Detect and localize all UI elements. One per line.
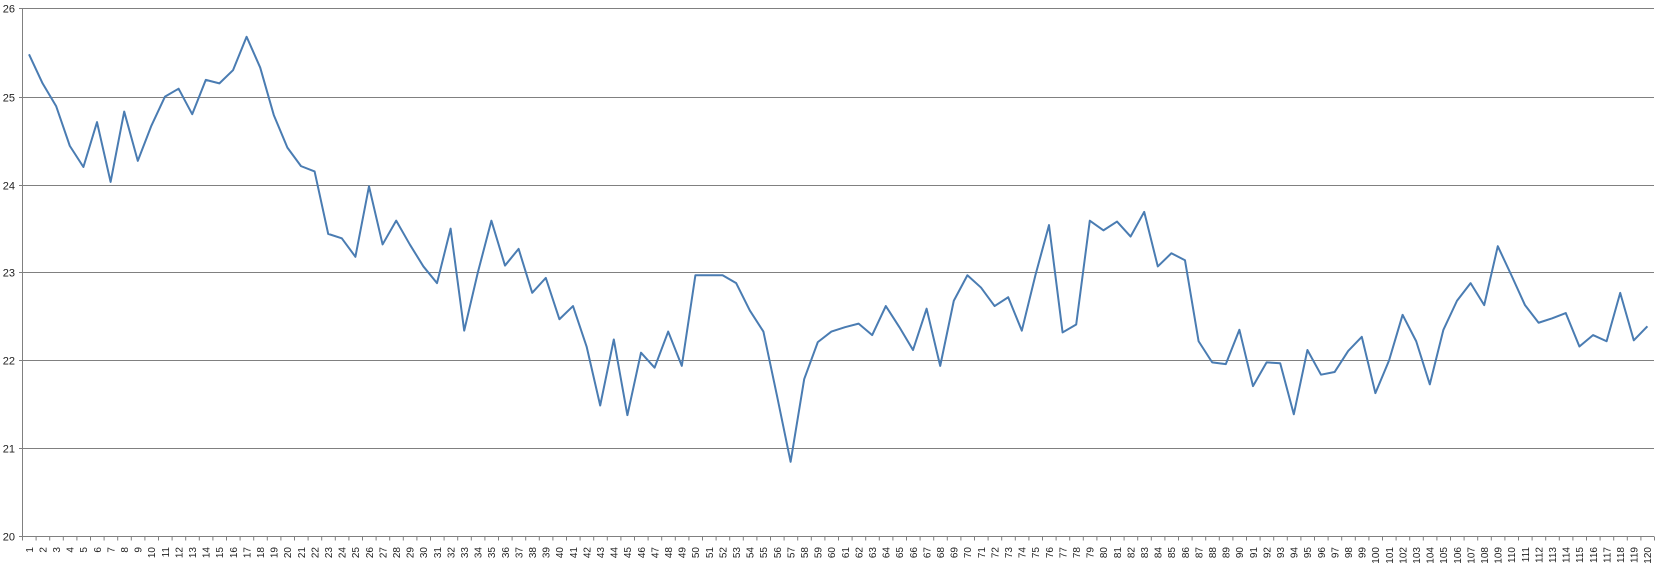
x axis labels: 42 [582, 547, 593, 558]
x axis labels: 74 [1018, 547, 1029, 558]
x axis labels: 22 [310, 547, 321, 558]
x axis labels: 27 [378, 547, 389, 558]
x axis labels: 116 [1589, 547, 1600, 563]
x axis labels: 58 [800, 547, 811, 558]
y axis labels: 21 [3, 444, 15, 456]
x axis labels: 81 [1113, 547, 1124, 558]
x axis labels: 15 [215, 547, 226, 558]
x axis labels: 3 [52, 547, 63, 553]
y axis labels: 24 [3, 180, 15, 192]
x axis labels: 104 [1426, 547, 1437, 564]
x axis labels: 68 [936, 547, 947, 558]
x axis labels: 1 [25, 547, 36, 553]
x axis labels: 102 [1398, 547, 1409, 564]
x axis labels: 6 [93, 547, 104, 553]
x axis labels: 66 [909, 547, 920, 558]
x axis labels: 8 [120, 547, 131, 553]
x axis labels: 63 [868, 547, 879, 558]
x axis labels: 33 [460, 547, 471, 558]
x axis labels: 117 [1602, 547, 1613, 563]
x axis labels: 13 [188, 547, 199, 558]
x axis labels: 26 [365, 547, 376, 558]
x axis labels: 39 [542, 547, 553, 558]
x axis labels: 64 [882, 547, 893, 558]
x axis labels: 88 [1208, 547, 1219, 558]
x axis labels: 94 [1290, 547, 1301, 558]
x axis labels: 107 [1466, 547, 1477, 564]
x axis labels: 32 [446, 547, 457, 558]
x axis labels: 111 [1521, 547, 1532, 562]
x axis labels: 73 [1004, 547, 1015, 558]
x axis labels: 21 [297, 547, 308, 558]
x axis labels: 37 [514, 547, 525, 558]
x axis labels: 36 [501, 547, 512, 558]
x axis labels: 41 [569, 547, 580, 558]
x axis labels: 34 [474, 547, 485, 558]
x axis labels: 108 [1480, 547, 1491, 564]
x axis labels: 55 [759, 547, 770, 558]
x axis labels: 96 [1317, 547, 1328, 558]
x axis labels: 114 [1562, 547, 1573, 563]
x axis labels: 17 [242, 547, 253, 558]
data line [29, 37, 1647, 462]
x axis labels: 83 [1140, 547, 1151, 558]
x axis labels: 118 [1616, 547, 1627, 563]
x axis labels: 77 [1058, 547, 1069, 558]
x axis labels: 56 [773, 547, 784, 558]
x axis labels: 51 [705, 547, 716, 558]
x axis labels: 79 [1086, 547, 1097, 558]
x axis labels: 12 [174, 547, 185, 558]
x axis labels: 99 [1358, 547, 1369, 558]
x axis labels: 80 [1099, 547, 1110, 558]
x axis labels: 65 [895, 547, 906, 558]
x axis labels: 53 [732, 547, 743, 558]
x axis labels: 30 [419, 547, 430, 558]
x axis labels: 76 [1045, 547, 1056, 558]
x axis labels: 23 [324, 547, 335, 558]
x axis labels: 97 [1330, 547, 1341, 558]
x axis labels: 49 [678, 547, 689, 558]
x axis labels: 43 [596, 547, 607, 558]
x axis labels: 16 [229, 547, 240, 558]
x axis labels: 19 [270, 547, 281, 558]
y axis labels: 22 [3, 356, 15, 368]
x axis labels: 57 [786, 547, 797, 558]
y axis labels: 20 [3, 532, 15, 544]
x axis labels: 110 [1507, 547, 1518, 563]
x axis labels: 84 [1154, 547, 1165, 558]
x axis labels: 101 [1385, 547, 1396, 564]
x axis labels: 103 [1412, 547, 1423, 564]
x axis labels: 98 [1344, 547, 1355, 558]
x axis labels: 46 [637, 547, 648, 558]
x axis labels: 70 [963, 547, 974, 558]
x axis labels: 100 [1371, 547, 1382, 564]
x axis labels: 89 [1222, 547, 1233, 558]
x axis labels: 105 [1439, 547, 1450, 564]
x axis labels: 38 [528, 547, 539, 558]
x axis labels: 95 [1303, 547, 1314, 558]
x axis labels: 90 [1235, 547, 1246, 558]
x axis labels: 48 [664, 547, 675, 558]
x axis labels: 7 [106, 547, 117, 553]
x axis labels: 93 [1276, 547, 1287, 558]
x axis labels: 85 [1167, 547, 1178, 558]
x axis labels: 61 [841, 547, 852, 558]
x axis labels: 60 [827, 547, 838, 558]
y axis labels [3, 4, 15, 544]
x axis labels: 40 [555, 547, 566, 558]
x axis labels: 11 [161, 547, 172, 557]
x axis labels: 35 [487, 547, 498, 558]
x axis labels: 115 [1575, 547, 1586, 563]
x axis labels: 52 [718, 547, 729, 558]
x axis labels: 24 [338, 547, 349, 558]
x axis labels: 109 [1494, 547, 1505, 564]
x axis labels: 59 [814, 547, 825, 558]
x axis labels: 10 [147, 547, 158, 558]
x axis labels: 47 [650, 547, 661, 558]
x axis labels: 20 [283, 547, 294, 558]
x axis labels: 120 [1643, 547, 1654, 564]
x axis labels: 87 [1194, 547, 1205, 558]
x axis labels: 92 [1262, 547, 1273, 558]
x axis labels: 112 [1534, 547, 1545, 563]
x axis labels: 86 [1181, 547, 1192, 558]
x axis labels: 4 [66, 547, 77, 553]
y axis labels: 26 [3, 4, 15, 16]
y axis labels: 25 [3, 92, 15, 104]
x axis labels: 119 [1630, 547, 1641, 563]
x axis labels: 75 [1031, 547, 1042, 558]
x axis labels: 28 [392, 547, 403, 558]
x axis labels: 54 [746, 547, 757, 558]
x axis labels: 91 [1249, 547, 1260, 558]
x axis labels: 31 [433, 547, 444, 558]
x axis labels: 50 [691, 547, 702, 558]
x axis labels: 9 [134, 547, 145, 553]
x axis labels: 2 [38, 547, 49, 553]
x axis labels: 25 [351, 547, 362, 558]
x axis labels: 78 [1072, 547, 1083, 558]
x axis labels: 29 [406, 547, 417, 558]
x axis labels: 14 [202, 547, 213, 558]
x axis labels: 72 [990, 547, 1001, 558]
x axis labels: 67 [922, 547, 933, 558]
x axis labels: 44 [610, 547, 621, 558]
y axis labels: 23 [3, 268, 15, 280]
x axis labels: 18 [256, 547, 267, 558]
x axis labels: 106 [1453, 547, 1464, 564]
x axis labels [25, 547, 1654, 564]
x axis labels: 5 [79, 547, 90, 553]
x axis labels: 71 [977, 547, 988, 558]
x axis labels: 113 [1548, 547, 1559, 563]
x axis labels: 69 [950, 547, 961, 558]
x axis labels: 45 [623, 547, 634, 558]
x axis labels: 62 [854, 547, 865, 558]
x axis labels: 82 [1126, 547, 1137, 558]
